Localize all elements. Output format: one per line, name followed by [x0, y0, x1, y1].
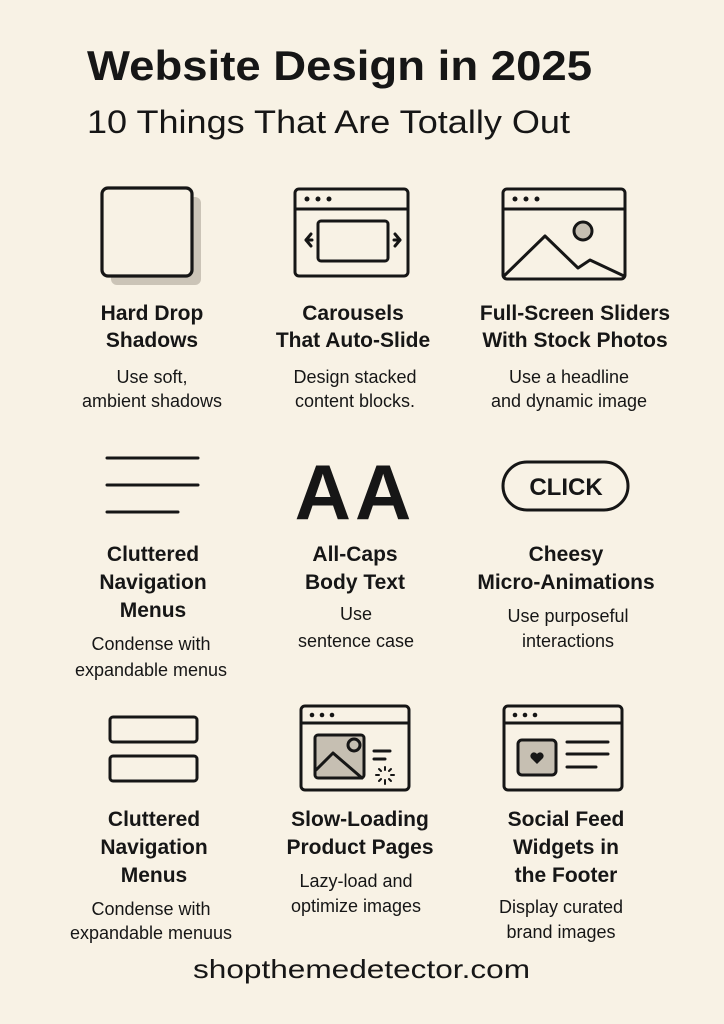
icon: stacked bars	[110, 717, 197, 781]
footer: shopthemedetector.com	[193, 954, 530, 984]
text: cheesy micro animations: interactions	[522, 631, 614, 651]
subtitle: 10 Things That Are Totally Out	[87, 104, 570, 140]
text: cheesy micro animations: Micro-Animations	[477, 571, 655, 594]
text: cluttered navigation 1	[75, 543, 227, 680]
text: all-caps: All-Caps	[312, 543, 398, 566]
text: cluttered navigation 1: Menus	[120, 599, 186, 622]
text: cluttered navigation 2	[70, 808, 232, 943]
icon: CLICK button	[503, 462, 628, 510]
text: hard drop shadows: ambient shadows	[82, 391, 222, 411]
text: cluttered navigation 1: Cluttered	[107, 543, 199, 566]
icon: hamburger lines	[107, 458, 198, 512]
icon: hard drop shadow square	[102, 188, 201, 285]
text: carousels: content blocks.	[295, 391, 415, 411]
text: full-screen sliders	[480, 302, 670, 411]
text: carousels: That Auto-Slide	[276, 329, 430, 352]
title: Website Design in 2025	[87, 42, 592, 89]
icon: social feed browser	[504, 706, 622, 790]
text: cheesy micro animations	[477, 543, 655, 651]
text: social feed	[499, 808, 624, 942]
icon: slow loading browser	[301, 706, 409, 790]
text: carousels	[276, 302, 430, 411]
text: slow-loading: optimize images	[291, 896, 421, 916]
text: social feed: the Footer	[515, 864, 617, 887]
icon: AA: AA	[295, 448, 415, 536]
text: cluttered navigation 1: expandable menus	[75, 660, 227, 680]
text: all-caps	[298, 543, 414, 651]
text: full-screen sliders: Use a headline	[509, 367, 629, 387]
text: slow-loading: Product Pages	[286, 836, 434, 859]
text: cluttered navigation 2: Condense with	[91, 899, 211, 919]
icon: carousel browser	[295, 189, 408, 276]
text: hard drop shadows: Shadows	[106, 329, 198, 352]
text: cheesy micro animations: Use purposeful	[507, 606, 629, 626]
text: social feed: Social Feed	[508, 808, 624, 831]
text: slow-loading	[286, 808, 434, 916]
text: slow-loading: Slow-Loading	[291, 808, 429, 831]
icon: CLICK button: CLICK	[529, 474, 603, 501]
text: social feed: Display curated	[499, 897, 623, 917]
text: full-screen sliders: and dynamic image	[491, 391, 647, 411]
text: cluttered navigation 1: Condense with	[91, 634, 211, 654]
text: social feed: Widgets in	[513, 836, 619, 859]
icon: stock photo browser	[503, 189, 625, 279]
text: full-screen sliders: With Stock Photos	[482, 329, 668, 352]
text: all-caps: sentence case	[298, 631, 414, 651]
text: cluttered navigation 1: Navigation	[99, 571, 207, 594]
text: cluttered navigation 2: expandable menuus	[70, 923, 232, 943]
text: hard drop shadows: Use soft,	[116, 367, 188, 387]
text: cluttered navigation 2: Navigation	[100, 836, 208, 859]
text: hard drop shadows	[82, 302, 222, 411]
text: cluttered navigation 2: Cluttered	[108, 808, 200, 831]
text: cheesy micro animations: Cheesy	[529, 543, 604, 566]
text: carousels: Carousels	[302, 302, 404, 325]
text: all-caps: Body Text	[305, 571, 405, 594]
text: cluttered navigation 2: Menus	[121, 864, 187, 887]
text: carousels: Design stacked	[293, 367, 417, 387]
text: all-caps: Use	[340, 604, 372, 624]
text: social feed: brand images	[506, 922, 616, 942]
text: slow-loading: Lazy-load and	[299, 871, 413, 891]
text: hard drop shadows: Hard Drop	[101, 302, 203, 325]
text: full-screen sliders: Full-Screen Sliders	[480, 302, 670, 325]
